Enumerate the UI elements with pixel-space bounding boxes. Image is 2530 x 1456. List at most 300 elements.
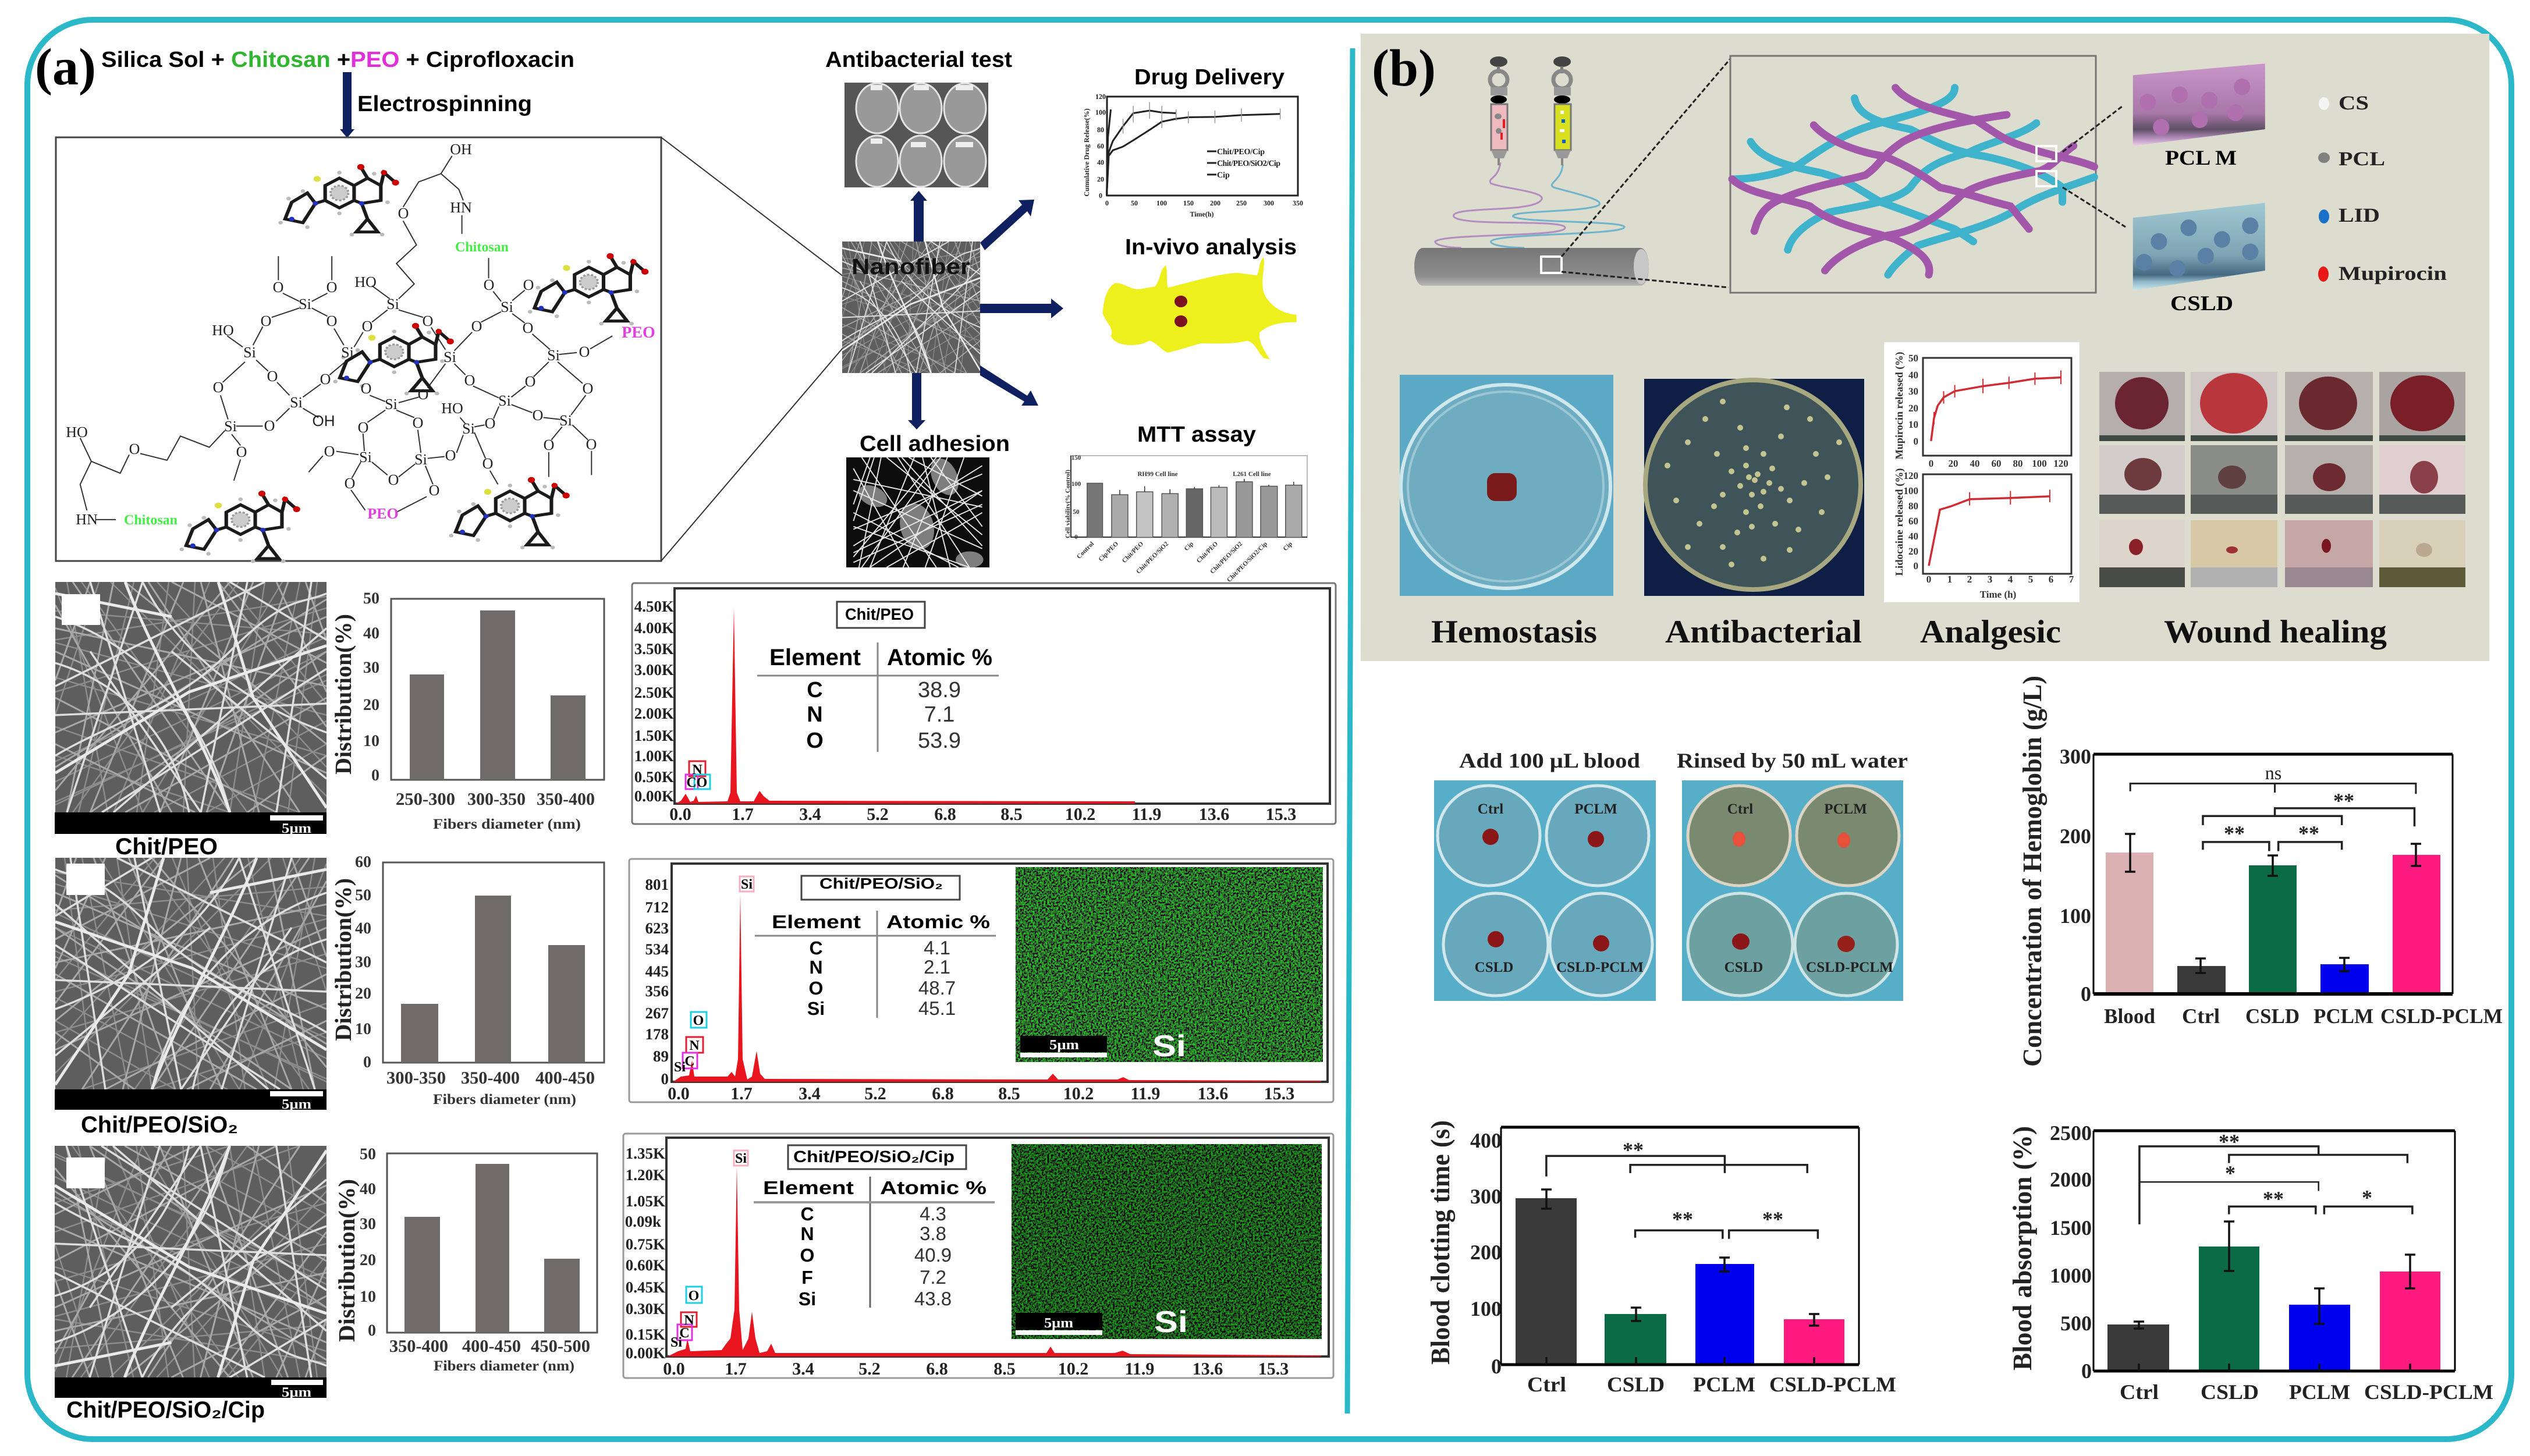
chart: blood absorption: * — [2362, 1186, 2372, 1209]
chart: blood clotting time: ** — [1623, 1138, 1644, 1162]
chart card: analgesic release curves: 120 — [2053, 458, 2068, 469]
chart: concentration of hemoglobin: ** — [2224, 822, 2245, 845]
chart card: analgesic release curves: 20 — [1949, 458, 1958, 469]
chart: cumulative drug release: 200 — [1210, 199, 1220, 207]
chart: blood absorption: 500 — [2060, 1312, 2092, 1335]
chart card: analgesic release curves: Mupirocin released (%) — [1893, 351, 1905, 460]
diagram: fibre mesh inset — [1730, 56, 2096, 293]
chart: fibre diameter distribution 3: 20 — [360, 1251, 376, 1269]
chart: EDS spectrum Chit/PEO: 3.4 — [799, 805, 821, 824]
panel: a, silica chitosan nanofiber — [35, 38, 1336, 1423]
chart: cumulative drug release — [1083, 93, 1303, 218]
chart card: analgesic release curves: 3 — [1988, 574, 1992, 585]
chart: concentration of hemoglobin: 300 — [2060, 745, 2091, 768]
chart: cell viability bars: Cip/PEO — [1097, 540, 1120, 563]
chart: EDS spectrum Chit/PEO/SiO2/Cip: 6.8 — [926, 1359, 948, 1379]
chart card: analgesic release curves: 1 — [1947, 574, 1952, 585]
chart: concentration of hemoglobin: Concentration of Hemoglobin (g/L) — [2017, 676, 2048, 1067]
chart: EDS spectrum Chit/PEO: N — [692, 762, 702, 777]
chart card: analgesic release curves: 4 — [2008, 574, 2013, 585]
chart: blood clotting time: 200 — [1470, 1241, 1502, 1264]
chart: fibre diameter distribution 2: 40 — [355, 919, 371, 937]
chart: cumulative drug release: 100 — [1095, 108, 1106, 116]
chart: fibre diameter distribution 3: 30 — [360, 1215, 376, 1233]
image: Si elemental map — [1016, 867, 1323, 1063]
atom labels: Chitosan — [455, 240, 509, 255]
chart: EDS spectrum Chit/PEO: C — [686, 775, 697, 790]
chart: EDS spectrum Chit/PEO/SiO2: O — [809, 978, 823, 999]
chart: blood clotting time — [1425, 1120, 1896, 1396]
image: Chit/PEO/SiO2/Cip SEM — [55, 1146, 327, 1400]
image: nanofiber SEM: Nanofiber — [851, 255, 970, 279]
bonds — [80, 156, 612, 520]
chart: EDS spectrum Chit/PEO: 2.00K — [634, 705, 674, 722]
chart: fibre diameter distribution 1: Distribution(%) — [330, 614, 356, 775]
chart card: analgesic release curves: 20 — [1908, 546, 1918, 557]
atom labels: O — [398, 205, 409, 222]
chart: concentration of hemoglobin: 0 — [2081, 982, 2091, 1006]
atom labels: O — [261, 312, 271, 329]
chart: EDS spectrum Chit/PEO/SiO2/Cip: 0.09k — [625, 1213, 661, 1230]
chart: EDS spectrum Chit/PEO/SiO2/Cip: 0.45K — [626, 1279, 665, 1296]
chart: blood clotting time: ** — [1762, 1208, 1783, 1231]
chart: EDS spectrum Chit/PEO/SiO2/Cip: Chit/PEO/SiO₂/Cip — [793, 1148, 954, 1166]
chart: cell viability bars: Control — [1076, 541, 1095, 560]
figure: rinsed by 50 mL water — [1677, 749, 1908, 1001]
chart: EDS spectrum Chit/PEO/SiO2: Si — [674, 1060, 686, 1075]
chart: EDS spectrum Chit/PEO: 3.50K — [634, 640, 674, 658]
chart: EDS spectrum Chit/PEO/SiO2/Cip: 4.3 — [920, 1203, 946, 1224]
heading: Antibacterial test — [825, 48, 1012, 72]
chart: blood clotting time: CSLD — [1607, 1373, 1665, 1396]
image: rinsed dishes: PCLM — [1824, 801, 1867, 817]
atom labels: O — [324, 443, 335, 460]
chart: EDS spectrum Chit/PEO/SiO2/Cip: 1.35K — [626, 1145, 665, 1162]
chart card: analgesic release curves: 7 — [2069, 574, 2074, 585]
chart: EDS spectrum Chit/PEO/SiO2: 48.7 — [918, 977, 956, 999]
chart: cumulative drug release: 80 — [1097, 126, 1104, 134]
chart card: analgesic release curves: 0 — [1926, 574, 1931, 585]
chart: fibre diameter distribution 3: 50 — [360, 1145, 376, 1163]
chart: fibre diameter distribution 2: 10 — [355, 1020, 371, 1038]
chart: EDS spectrum Chit/PEO/SiO2/Cip: C — [679, 1326, 690, 1341]
atom labels: O — [264, 417, 275, 434]
chart: EDS spectrum Chit/PEO: 6.8 — [934, 805, 956, 824]
chart: EDS spectrum Chit/PEO: Atomic % — [887, 645, 992, 670]
chart: blood clotting time: 300 — [1470, 1185, 1502, 1208]
chart: blood clotting time: 100 — [1470, 1297, 1502, 1320]
chart: EDS spectrum Chit/PEO: 0.0 — [669, 805, 691, 824]
chart: EDS spectrum Chit/PEO: 13.6 — [1199, 805, 1229, 824]
chart: fibre diameter distribution 1: 30 — [363, 659, 379, 677]
chart: EDS spectrum Chit/PEO: 1.50K — [634, 727, 674, 744]
section: drug delivery — [1083, 65, 1303, 218]
chart: EDS spectrum Chit/PEO/SiO2/Cip: 0.0 — [663, 1359, 685, 1379]
heading: Drug Delivery — [1134, 65, 1284, 90]
collector cylinder — [1414, 248, 1649, 286]
legend: fibre components: PCL — [2339, 148, 2385, 170]
image: rinsed dishes — [1682, 780, 1903, 1001]
chart: EDS spectrum Chit/PEO/SiO2/Cip: 5.2 — [858, 1359, 881, 1379]
chart: EDS spectrum Chit/PEO/SiO2/Cip: 0.30K — [626, 1300, 665, 1317]
chart: blood absorption: CSLD — [2201, 1380, 2259, 1404]
chart: EDS spectrum Chit/PEO/SiO2/Cip: Si — [799, 1288, 816, 1309]
chart: EDS spectrum Chit/PEO: 2.50K — [634, 684, 674, 701]
image: dishes with blood: PCLM — [1574, 801, 1617, 817]
chart: concentration of hemoglobin: ** — [2333, 789, 2354, 812]
captions: four functions — [1431, 614, 2387, 650]
chart: cell viability bars: Chit/PEO/SiO2 — [1209, 540, 1244, 576]
caption: Chit/PEO: Chit/PEO — [115, 834, 218, 860]
background: beige summary panel — [1361, 34, 2489, 661]
chart: cumulative drug release: Cumulative Drug Release(%) — [1083, 108, 1091, 197]
captions: four functions: Hemostasis — [1431, 614, 1597, 650]
captions: four functions: Wound healing — [2164, 614, 2387, 650]
chart: EDS spectrum Chit/PEO: 4.50K — [634, 598, 674, 615]
atom labels: Si — [243, 344, 256, 361]
chart: fibre diameter distribution 1: 350-400 — [537, 790, 595, 809]
atom labels: O — [423, 312, 433, 329]
chart: fibre diameter distribution 2: 0 — [363, 1053, 371, 1071]
legend: fibre components: Mupirocin — [2339, 263, 2447, 285]
chart: concentration of hemoglobin: PCLM — [2313, 1004, 2373, 1028]
row: Chit/PEO/SiO2/Cip — [55, 1134, 1333, 1423]
atom labels: HO — [66, 424, 88, 441]
chart: EDS spectrum Chit/PEO: 0.50K — [634, 768, 674, 786]
atom labels: O — [523, 319, 533, 336]
chart: EDS spectrum Chit/PEO/SiO2: 15.3 — [1264, 1084, 1294, 1103]
chart: fibre diameter distribution 2: 350-400 — [461, 1068, 520, 1088]
chart: blood absorption: CSLD-PCLM — [2364, 1380, 2493, 1404]
image: Si elemental map dark: Si — [1154, 1305, 1188, 1339]
image: antibacterial plate — [1644, 379, 1864, 596]
chart: fibre diameter distribution 1: 300-350 — [467, 790, 526, 809]
chart: fibre diameter distribution 3: 450-500 — [531, 1337, 590, 1356]
chart: EDS spectrum Chit/PEO: 38.9 — [918, 678, 961, 702]
atom labels: O — [267, 368, 278, 385]
chart: EDS spectrum Chit/PEO/SiO2/Cip: 7.2 — [920, 1266, 946, 1288]
teal divider between panels — [1347, 48, 1353, 1414]
label: electrospinning: Electrospinning — [357, 92, 532, 116]
chart: EDS spectrum Chit/PEO: O — [806, 729, 824, 753]
heading: panel b label: (b) — [1372, 40, 1436, 97]
atom labels: O — [418, 386, 428, 403]
chart card: analgesic release curves: 100 — [2032, 458, 2047, 469]
chart: EDS spectrum Chit/PEO: 10.2 — [1065, 805, 1095, 824]
chart: EDS spectrum Chit/PEO/SiO2/Cip: 1.20K — [626, 1166, 665, 1184]
legend: fibre components — [2318, 93, 2447, 285]
image: cell adhesion SEM — [846, 454, 989, 568]
illustration: PCL M fibre — [2133, 63, 2265, 169]
chart: EDS spectrum Chit/PEO: 4.00K — [634, 619, 674, 637]
chart: EDS spectrum Chit/PEO: 1.00K — [634, 747, 674, 765]
illustration: PCL M fibre: PCL M — [2165, 146, 2237, 169]
chart: blood clotting time: 0 — [1491, 1355, 1502, 1378]
chart: cumulative drug release: 60 — [1097, 142, 1104, 150]
chart card: analgesic release curves: 6 — [2049, 574, 2053, 585]
chart: EDS spectrum Chit/PEO/SiO2: 534 — [645, 940, 669, 958]
chart: EDS spectrum Chit/PEO/SiO2/Cip: 13.6 — [1193, 1359, 1223, 1379]
image: dishes with blood: Ctrl — [1478, 801, 1503, 817]
atom labels: Si — [547, 347, 560, 364]
chart: EDS spectrum Chit/PEO/SiO2: 801 — [645, 876, 669, 893]
chart: EDS spectrum Chit/PEO/SiO2/Cip: Element — [763, 1177, 854, 1198]
atom labels: Si — [559, 412, 572, 429]
chart: fibre diameter distribution 3: 0 — [368, 1322, 376, 1340]
atom labels: HO — [441, 400, 463, 417]
atom labels: O — [445, 447, 456, 464]
legend: fibre components: LID — [2339, 205, 2380, 226]
chart card: analgesic release curves: Lidocaine released (%) — [1893, 468, 1905, 576]
chart: cumulative drug release: 120 — [1095, 93, 1106, 101]
chart: concentration of hemoglobin — [2017, 676, 2503, 1067]
chart: EDS spectrum Chit/PEO/SiO2: 8.5 — [998, 1084, 1020, 1103]
chart: cell viability bars: Chit/PEO/SiO2 — [1135, 540, 1170, 576]
section: MTT assay — [1064, 422, 1307, 584]
chart: EDS spectrum Chit/PEO/SiO2: 6.8 — [932, 1084, 954, 1103]
chart: EDS spectrum Chit/PEO/SiO2: 89 — [653, 1047, 669, 1065]
chart: fibre diameter distribution 2: 30 — [355, 953, 371, 971]
atom labels: Si — [385, 396, 398, 413]
chart: EDS spectrum Chit/PEO/SiO2 — [629, 859, 1333, 1103]
chart: blood absorption: Ctrl — [2120, 1380, 2159, 1404]
chart: fibre diameter distribution 1: 0 — [371, 766, 379, 784]
atom labels: Si — [501, 299, 513, 315]
chart: blood clotting time: Blood clotting time (s) — [1425, 1120, 1456, 1365]
chart: cell viability bars — [1064, 454, 1307, 584]
atom labels: O — [485, 415, 495, 432]
chart: EDS spectrum Chit/PEO/SiO2: 1.7 — [730, 1084, 753, 1103]
chart: fibre diameter distribution 3: 400-450 — [462, 1337, 521, 1356]
chart: EDS spectrum Chit/PEO/SiO2: 712 — [645, 899, 669, 916]
row: Chit/PEO — [55, 582, 1336, 860]
chart: cumulative drug release: 300 — [1264, 199, 1274, 207]
chart card: analgesic release curves: 120 — [1903, 470, 1918, 481]
chart: EDS spectrum Chit/PEO/SiO2/Cip: Si — [735, 1151, 747, 1166]
chart: cell viability bars: Chit/PEO — [1195, 540, 1219, 564]
chart: cell viability bars: Cip — [1183, 541, 1195, 552]
chart: EDS spectrum Chit/PEO/SiO2: C — [684, 1054, 695, 1069]
atom labels: O — [484, 276, 494, 293]
section: antibacterial test — [825, 48, 1012, 187]
chart: concentration of hemoglobin: Blood — [2104, 1004, 2155, 1028]
section: cell adhesion — [846, 432, 1010, 568]
chart: fibre diameter distribution 2: 400-450 — [535, 1068, 595, 1088]
atom labels: OH — [450, 141, 472, 158]
chart: EDS spectrum Chit/PEO/SiO2/Cip: 10.2 — [1058, 1359, 1088, 1379]
chart card: analgesic release curves: 80 — [2013, 458, 2023, 469]
arrows: to fibre close-ups — [2063, 106, 2126, 227]
atom labels: O — [583, 380, 593, 397]
diagram: chemical structure box — [56, 137, 661, 563]
chart: EDS spectrum Chit/PEO: 5.2 — [867, 805, 889, 824]
chart: fibre diameter distribution 2 — [330, 853, 604, 1107]
atom labels: O — [327, 312, 337, 329]
panel: b, multifunctional wound dressing — [1361, 34, 2503, 1404]
chart: EDS spectrum Chit/PEO: 11.9 — [1132, 805, 1161, 824]
atom labels — [66, 141, 655, 528]
chart card: analgesic release curves: 10 — [1908, 419, 1918, 430]
image: Si elemental map: 5μm — [1049, 1038, 1079, 1053]
illustration: CSLD fibre: CSLD — [2170, 292, 2233, 315]
chart: fibre diameter distribution 1: 50 — [363, 589, 379, 608]
chart card: analgesic release curves: 50 — [1908, 353, 1918, 364]
chart card: analgesic release curves: 5 — [2028, 574, 2033, 585]
chart: cell viability bars: 100 — [1071, 481, 1081, 488]
chart: cell viability bars: Cell viability(% Control) — [1064, 470, 1071, 538]
section: in-vivo analysis — [1102, 235, 1297, 359]
chart: EDS spectrum Chit/PEO/SiO2/Cip: 1.05K — [626, 1192, 665, 1210]
atom labels: HN — [76, 511, 98, 528]
chart: EDS spectrum Chit/PEO/SiO2/Cip: Atomic % — [880, 1177, 987, 1198]
title: formulation: Silica Sol + Chitosan +PEO + Ciprofloxacin — [101, 48, 574, 72]
chart: fibre diameter distribution 2: 20 — [355, 985, 371, 1003]
atom labels: Si — [290, 394, 303, 411]
image: Si elemental map dark: 5μm — [1044, 1316, 1073, 1331]
chart: concentration of hemoglobin: ns — [2265, 762, 2281, 783]
chart card: analgesic release curves: 80 — [1908, 500, 1918, 512]
chart: EDS spectrum Chit/PEO/SiO2/Cip: O — [800, 1245, 814, 1266]
chart: EDS spectrum Chit/PEO/SiO2: C — [809, 937, 823, 958]
chart: concentration of hemoglobin: ** — [2298, 822, 2319, 845]
chart: EDS spectrum Chit/PEO/SiO2: 356 — [645, 982, 669, 1000]
image: rinsed dishes: CSLD — [1724, 960, 1763, 975]
atom labels: HN — [450, 199, 472, 216]
chart: blood absorption: ** — [2263, 1187, 2284, 1210]
chart: EDS spectrum Chit/PEO/SiO2: 445 — [645, 963, 669, 980]
chart card: analgesic release curves: 20 — [1908, 403, 1918, 414]
image: Si elemental map: Si — [1152, 1029, 1186, 1063]
atom labels: O — [464, 372, 475, 389]
chart: EDS spectrum Chit/PEO/SiO2: 2.1 — [924, 956, 950, 978]
chart: EDS spectrum Chit/PEO/SiO2/Cip — [623, 1134, 1333, 1379]
chart: EDS spectrum Chit/PEO/SiO2: N — [689, 1038, 700, 1053]
chart card: analgesic release curves: 40 — [1908, 531, 1918, 542]
chart: fibre diameter distribution 2: 300-350 — [386, 1068, 446, 1088]
chart card: analgesic release curves: 2 — [1967, 574, 1972, 585]
chart: concentration of hemoglobin: CSLD-PCLM — [2380, 1004, 2503, 1028]
chart: EDS spectrum Chit/PEO/SiO2: O — [693, 1013, 704, 1028]
chart: blood absorption: Blood absorption (%) — [2007, 1126, 2037, 1370]
atom labels: O — [236, 443, 247, 460]
chart: blood clotting time: PCLM — [1693, 1373, 1755, 1396]
chart card: analgesic release curves: 100 — [1903, 485, 1918, 496]
chart: blood absorption: * — [2225, 1162, 2236, 1185]
caption: Chit/PEO/SiO2: Chit/PEO/SiO₂ — [81, 1112, 238, 1138]
chart card: analgesic release curves: 60 — [1908, 516, 1918, 527]
arrows: from nanofiber to applications — [908, 191, 1063, 429]
icons: ciprofloxacin molecules — [179, 164, 648, 563]
chart: blood clotting time: Ctrl — [1527, 1373, 1566, 1396]
chart card: analgesic release curves: 40 — [1970, 458, 1980, 469]
chart: EDS spectrum Chit/PEO: 1.7 — [732, 805, 754, 824]
chart: cumulative drug release: 100 — [1156, 199, 1167, 207]
chart: blood absorption: 1000 — [2050, 1264, 2092, 1287]
illustration: CSLD fibre — [2133, 203, 2265, 315]
chart: EDS spectrum Chit/PEO/SiO2/Cip: 0.75K — [626, 1235, 665, 1253]
chart: cumulative drug release: Chit/PEO/SiO2/Cip — [1217, 159, 1280, 168]
image: Chit/PEO/SiO2/Cip SEM: 5μm — [282, 1385, 311, 1400]
chart: EDS spectrum Chit/PEO — [632, 583, 1336, 824]
chart card: analgesic release curves: Time (h) — [1980, 589, 2016, 600]
chart: EDS spectrum Chit/PEO/SiO2/Cip: 3.4 — [792, 1359, 814, 1379]
chart: fibre diameter distribution 1: 10 — [363, 732, 379, 750]
chart: fibre diameter distribution 3: 10 — [360, 1288, 376, 1306]
atom labels: Si — [498, 392, 511, 409]
atom labels: Si — [341, 344, 354, 361]
chart: EDS spectrum Chit/PEO/SiO2: 5.2 — [864, 1084, 886, 1103]
atom labels: O — [579, 343, 590, 360]
chart: cumulative drug release: 350 — [1293, 199, 1303, 207]
chart: concentration of hemoglobin: 200 — [2060, 825, 2091, 848]
chart: cumulative drug release: 40 — [1097, 158, 1104, 166]
image: Chit/PEO/SiO2 SEM: 5μm — [282, 1097, 311, 1112]
chart: EDS spectrum Chit/PEO: Chit/PEO — [845, 605, 914, 623]
chart card: analgesic release curves: 0 — [1929, 458, 1933, 469]
chart: EDS spectrum Chit/PEO: 15.3 — [1266, 805, 1296, 824]
chart: concentration of hemoglobin: Ctrl — [2182, 1004, 2220, 1028]
chart: EDS spectrum Chit/PEO/SiO2: 3.4 — [799, 1084, 821, 1103]
atom labels: O — [327, 279, 337, 296]
chart: fibre diameter distribution 1: Fibers diameter (nm) — [433, 816, 581, 832]
atom labels: O — [471, 318, 482, 335]
chart: cell viability bars: L261 Cell line — [1233, 471, 1271, 478]
chart: cell viability bars: 50 — [1073, 509, 1080, 516]
chart: EDS spectrum Chit/PEO/SiO2: 13.6 — [1198, 1084, 1228, 1103]
heading: In-vivo analysis — [1125, 235, 1297, 260]
atom labels: O — [273, 279, 283, 296]
captions: four functions: Antibacterial — [1665, 614, 1862, 650]
chart: EDS spectrum Chit/PEO: 7.1 — [924, 702, 954, 727]
heading: MTT assay — [1137, 422, 1256, 447]
image: hemostasis dish — [1400, 375, 1613, 596]
image: Chit/PEO/SiO2 SEM — [55, 858, 327, 1112]
chart: EDS spectrum Chit/PEO/SiO2: 11.9 — [1131, 1084, 1160, 1103]
image: rinsed dishes: Ctrl — [1727, 801, 1753, 817]
atom labels: O — [413, 414, 423, 431]
atom labels: O — [129, 441, 140, 457]
chart: cumulative drug release: 150 — [1183, 199, 1194, 207]
chart: EDS spectrum Chit/PEO/SiO2/Cip: 11.9 — [1125, 1359, 1154, 1379]
chart: EDS spectrum Chit/PEO/SiO2: 623 — [645, 919, 669, 937]
figure: add 100 uL blood — [1434, 749, 1656, 1001]
chart: cell viability bars: 150 — [1071, 454, 1081, 461]
chart: EDS spectrum Chit/PEO: O — [697, 775, 707, 790]
image: wound healing photo grid — [2099, 372, 2465, 587]
chart: cumulative drug release: Chit/PEO/Cip — [1217, 148, 1265, 157]
syringe: left pink — [1490, 56, 1507, 165]
chart: blood absorption — [2007, 1121, 2493, 1404]
chart: fibre diameter distribution 3: Distribution(%) — [333, 1179, 360, 1342]
chart: fibre diameter distribution 1: 40 — [363, 624, 379, 642]
chart: EDS spectrum Chit/PEO/SiO2/Cip: 43.8 — [914, 1288, 952, 1309]
atom labels: O — [320, 371, 331, 388]
chart: EDS spectrum Chit/PEO: Element — [769, 645, 861, 670]
atom labels: O — [429, 482, 439, 499]
chart: EDS spectrum Chit/PEO/SiO2/Cip: C — [800, 1203, 814, 1224]
chart: blood absorption: 2000 — [2050, 1168, 2092, 1191]
chart card: analgesic release curves: 0 — [1914, 560, 1918, 571]
chart: EDS spectrum Chit/PEO/SiO2/Cip: N — [684, 1313, 694, 1328]
image: Chit/PEO SEM — [55, 582, 327, 836]
legend: fibre components: CS — [2339, 93, 2369, 114]
chart: blood clotting time: CSLD-PCLM — [1769, 1373, 1896, 1396]
chart: EDS spectrum Chit/PEO/SiO2: Si — [807, 998, 825, 1019]
chart: fibre diameter distribution 3: 40 — [360, 1180, 376, 1198]
atom labels: O — [533, 407, 543, 424]
atom labels: HO — [212, 322, 234, 339]
atom labels: PEO — [367, 505, 399, 522]
